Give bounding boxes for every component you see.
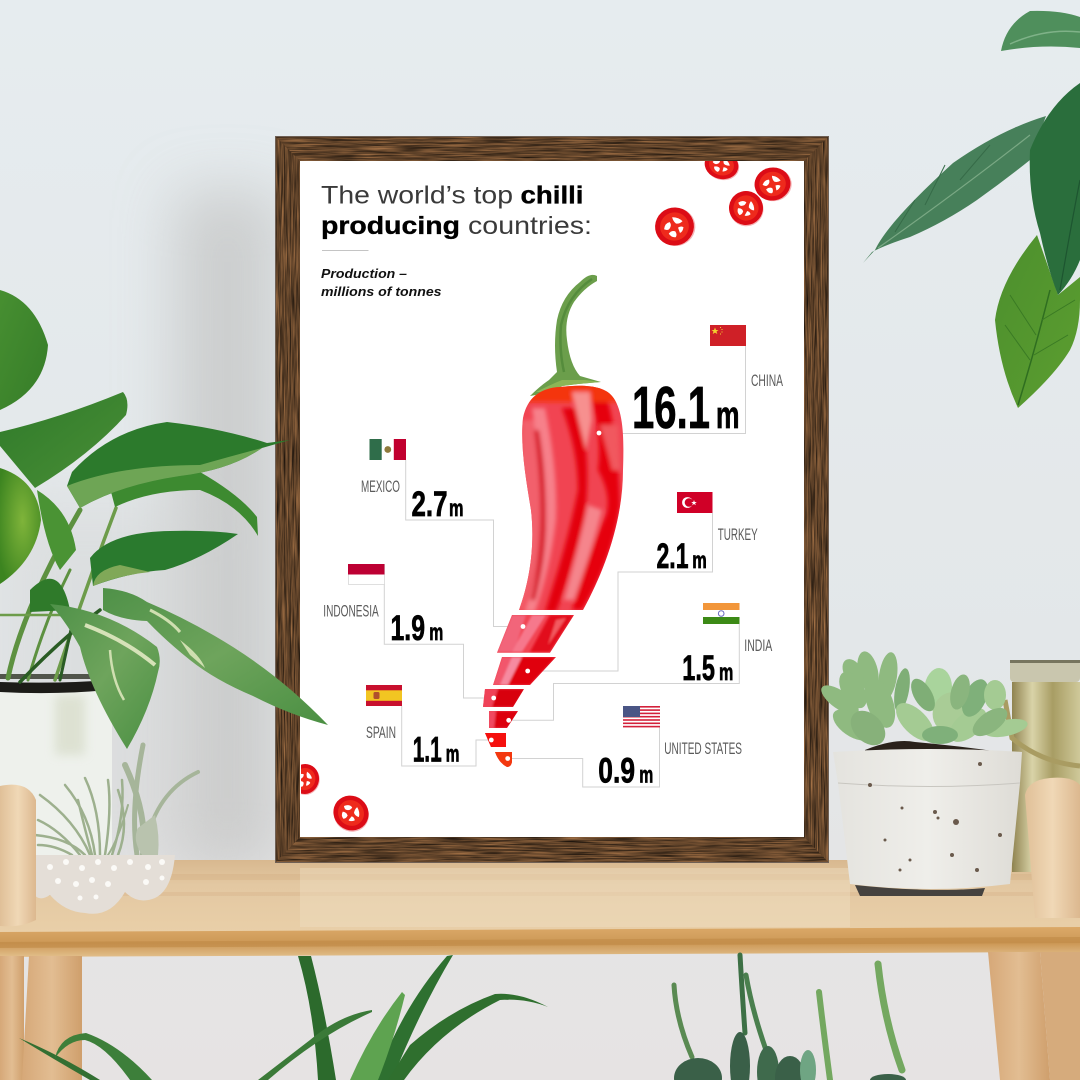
leaf B — [0, 392, 127, 488]
entry: Indonesia: 1.9 — [390, 609, 425, 648]
leaf dark — [1030, 83, 1080, 295]
air plant in dotted bowl — [30, 745, 198, 914]
concrete pot — [833, 749, 1022, 889]
entry: India: INDIA — [744, 636, 773, 655]
entry: China: m — [716, 395, 740, 437]
title — [321, 182, 592, 240]
entry: Indonesia: m — [429, 619, 443, 645]
entry: Spain: m — [446, 741, 459, 767]
entry: Mexico: m — [449, 495, 464, 521]
flag: Mexico — [370, 439, 406, 460]
entry: United States: UNITED STATES — [664, 739, 742, 758]
entry: Indonesia — [323, 564, 443, 648]
leader lines — [384, 346, 746, 787]
entry: Mexico — [361, 439, 464, 524]
leaf E — [90, 531, 238, 586]
subtitle: Production – — [321, 266, 407, 281]
chilli pepper sliced into bars — [480, 275, 630, 780]
left wooden peg — [0, 785, 36, 926]
entry: United States — [598, 706, 742, 790]
flag: China — [710, 325, 746, 346]
leaf A — [0, 290, 48, 410]
chilli slices top right — [655, 161, 792, 246]
entry: India: m — [719, 659, 733, 685]
right wooden peg — [1025, 778, 1080, 918]
leaf D — [110, 472, 258, 536]
spider plant below table — [19, 955, 548, 1080]
subtitle: millions of tonnes — [321, 284, 442, 299]
photo frame — [275, 136, 829, 863]
infographic poster — [288, 147, 794, 839]
flag: Indonesia — [348, 564, 384, 584]
can handle — [1005, 700, 1080, 766]
metal watering can — [1010, 660, 1080, 872]
leaf F variegated — [50, 604, 160, 749]
leaf top — [1001, 11, 1080, 51]
cactus below table — [674, 955, 906, 1080]
entry: Mexico: MEXICO — [361, 477, 400, 496]
entry: India — [682, 603, 773, 688]
title: The world’s top — [321, 182, 513, 210]
entry: Indonesia: INDONESIA — [323, 602, 379, 620]
leaf C — [67, 422, 290, 508]
entry: Mexico: 2.7 — [412, 485, 448, 524]
entry: United States: m — [639, 762, 653, 788]
succulent rosettes — [817, 649, 1029, 752]
chilli slices bottom left — [301, 764, 369, 832]
left plant pot — [0, 674, 112, 858]
round glossy leaf — [0, 468, 41, 584]
title: countries: — [468, 212, 592, 240]
leaf long — [863, 116, 1046, 263]
subtitle — [321, 266, 442, 299]
pepper body — [483, 386, 624, 767]
entry: Turkey: TURKEY — [718, 525, 758, 544]
entry: China: 16.1 — [632, 375, 710, 441]
entry: United States: 0.9 — [598, 752, 635, 790]
table legs — [0, 952, 1080, 1080]
flag: Spain — [366, 685, 402, 706]
succulent in concrete pot — [817, 649, 1080, 896]
flag: India — [703, 603, 740, 624]
wooden table top — [0, 860, 1080, 957]
left pothos plant — [0, 290, 328, 749]
leaf bright — [995, 235, 1080, 408]
title: chilli — [520, 182, 584, 210]
pepper stem and calyx — [530, 275, 601, 396]
entry: Spain: SPAIN — [366, 723, 396, 742]
leaf G variegated — [103, 588, 328, 725]
entry: Turkey: 2.1 — [656, 537, 688, 576]
entry: China — [632, 325, 783, 441]
entry: India: 1.5 — [682, 649, 715, 688]
title: producing — [321, 212, 460, 240]
entry: Spain — [366, 685, 459, 770]
data point dots — [489, 431, 601, 761]
flag: Turkey — [677, 492, 712, 513]
flag: United States — [623, 706, 660, 728]
right top leaves — [863, 11, 1080, 408]
entry: Turkey: m — [692, 547, 707, 573]
entry: Spain: 1.1 — [413, 731, 442, 770]
entry: China: CHINA — [751, 371, 783, 390]
entry: Turkey — [656, 492, 758, 576]
